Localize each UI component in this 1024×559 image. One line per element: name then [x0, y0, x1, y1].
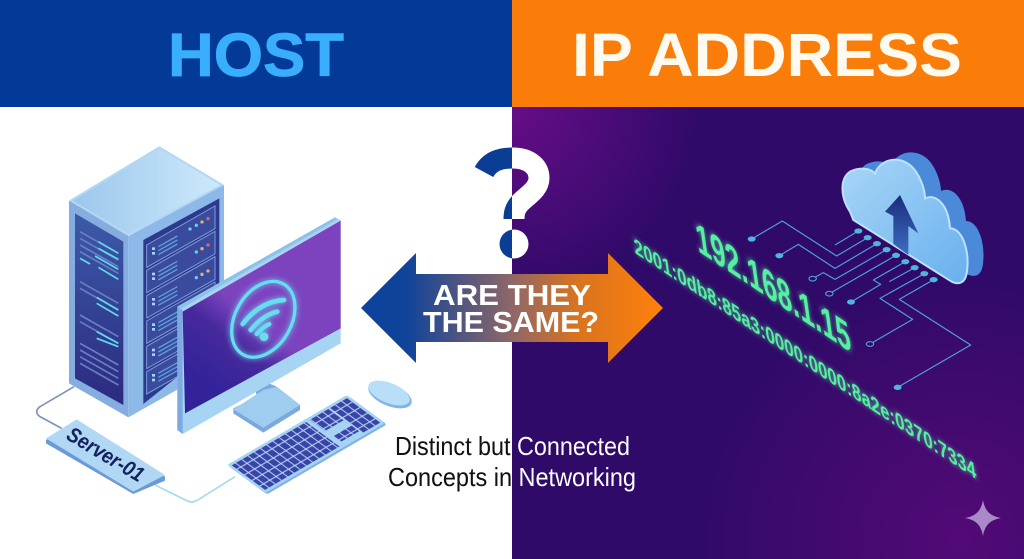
label: server-01: Server-01 — [62, 422, 149, 487]
server tower — [69, 147, 224, 417]
arrow text — [423, 280, 599, 339]
cables — [37, 387, 235, 502]
icon: sparkle — [965, 500, 1001, 536]
icon: wifi — [219, 270, 308, 369]
header: ip address — [512, 0, 1024, 107]
illustration: cloud circuit — [748, 152, 984, 390]
keyboard — [227, 395, 387, 494]
caption: Distinct but Connected — [395, 431, 630, 461]
header: host — [0, 0, 512, 107]
monitor — [177, 217, 341, 434]
circuit lines — [748, 221, 971, 390]
header: ip address: IP ADDRESS — [572, 21, 962, 89]
monitor stand — [233, 377, 300, 433]
icon: split question mark — [484, 158, 539, 258]
ipv6 address: 2001:0db8:85a3:0000:0000:8a2e:0370:7334 — [632, 232, 978, 485]
header: host: HOST — [168, 21, 344, 89]
icon: upload arrow — [885, 195, 918, 255]
ipv4 address: 192.168.1.15 — [693, 212, 854, 363]
arrow text: THE SAME? — [423, 307, 599, 339]
caption: Concepts in Networking — [388, 462, 636, 492]
illustration: host computer and server — [37, 147, 341, 502]
panel: left white background — [0, 107, 512, 559]
arrow text: ARE THEY — [433, 280, 591, 312]
double arrow — [361, 253, 663, 363]
mouse — [365, 375, 415, 414]
caption — [388, 431, 636, 492]
panel: right purple background — [512, 107, 1024, 559]
icon: cloud — [842, 152, 984, 283]
